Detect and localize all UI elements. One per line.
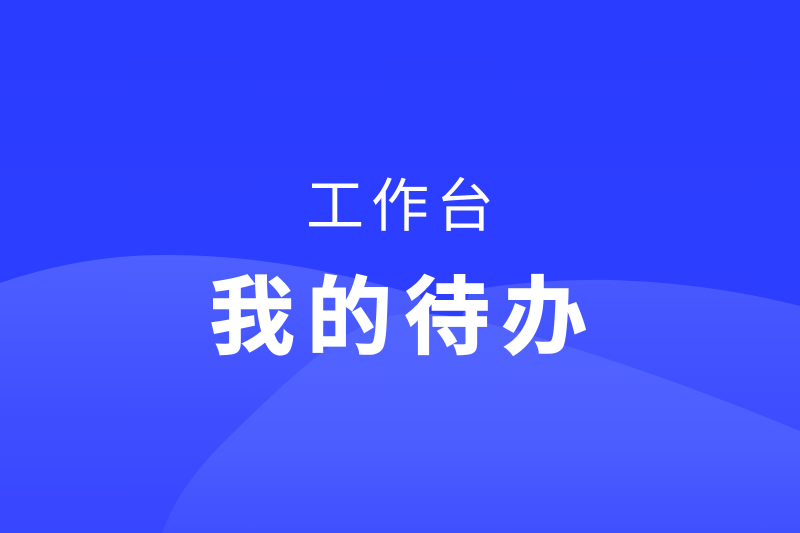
title: 我的待办 [210, 271, 600, 366]
wave: back left [0, 255, 500, 533]
wave: back right [400, 280, 800, 533]
wave: front [162, 313, 800, 533]
subtitle: 工作台 [306, 174, 501, 239]
